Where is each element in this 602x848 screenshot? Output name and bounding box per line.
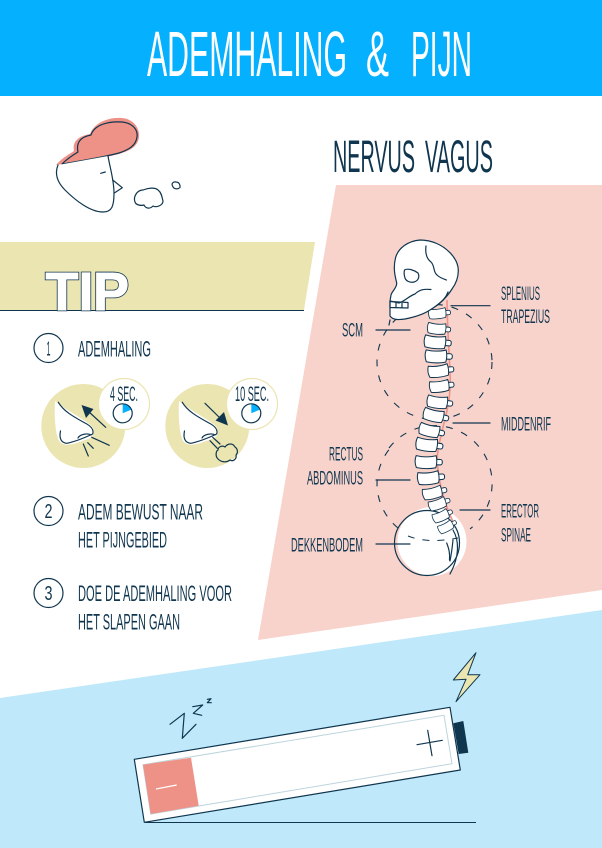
label: splenius trapezius: SPLENIUS (501, 283, 540, 305)
panel: nervus vagus background (258, 185, 602, 640)
panel: battery background (0, 610, 602, 848)
dashed breathing circles (377, 304, 492, 529)
icon: exhale 10 seconds: 10 SEC. (235, 383, 269, 406)
step 2: bewust ademen: HET PIJNGEBIED (78, 528, 167, 552)
skull (389, 240, 458, 325)
step 3: voor het slapen: 3 (44, 583, 52, 605)
heading: tip: TIP (46, 262, 129, 322)
label: erector spinae: SPINAE (501, 524, 531, 546)
step 3: voor het slapen: HET SLAPEN GAAN (78, 610, 180, 634)
label: scm: SCM (342, 320, 363, 342)
icon: sleeping z's (170, 699, 211, 738)
panel: tip band (0, 242, 315, 322)
step 2: bewust ademen: 2 (44, 501, 52, 523)
title: ADEMHALING (147, 18, 347, 90)
label: erector spinae (460, 500, 539, 546)
label: dekkenbodem: DEKKENBODEM (291, 534, 363, 556)
text: ERECTOR (501, 500, 539, 522)
label: middenrif (453, 414, 551, 436)
step 1: ademhaling: 1 (46, 338, 50, 360)
icon: exhale 10 seconds (165, 378, 278, 468)
text: VAGUS (425, 131, 493, 182)
icon: inhale 4 seconds (41, 378, 150, 468)
step 2: bewust ademen: ADEM BEWUST NAAR (78, 500, 203, 524)
header band: PIJN (411, 18, 472, 90)
header band (0, 0, 602, 96)
label: rectus abdominus (307, 444, 410, 490)
step 2: bewust ademen (34, 496, 203, 552)
heading: nervus vagus: NERVUS (333, 131, 415, 182)
title: & (366, 18, 389, 90)
label: rectus abdominus: RECTUS (329, 444, 363, 466)
icon: lightning bolt (453, 653, 480, 702)
vertebrae (415, 307, 458, 535)
heading: tip: TIP (46, 262, 129, 322)
step 3: voor het slapen: DOE DE ADEMHALING VOOR (78, 581, 232, 606)
step 1: ademhaling: ADEMHALING (78, 336, 151, 362)
icon: low battery (134, 707, 476, 822)
icon: head with cloud (56, 118, 180, 212)
step 1: ademhaling (34, 334, 151, 362)
pelvis (394, 507, 466, 576)
label: rectus abdominus: ABDOMINUS (307, 468, 363, 490)
label: scm (342, 320, 410, 342)
label: splenius trapezius (451, 283, 550, 328)
red nerve line (437, 300, 454, 524)
step 3: voor het slapen (34, 578, 232, 634)
diagram: skeleton spine (377, 240, 492, 576)
icon: inhale 4 seconds: 4 SEC. (110, 383, 138, 406)
